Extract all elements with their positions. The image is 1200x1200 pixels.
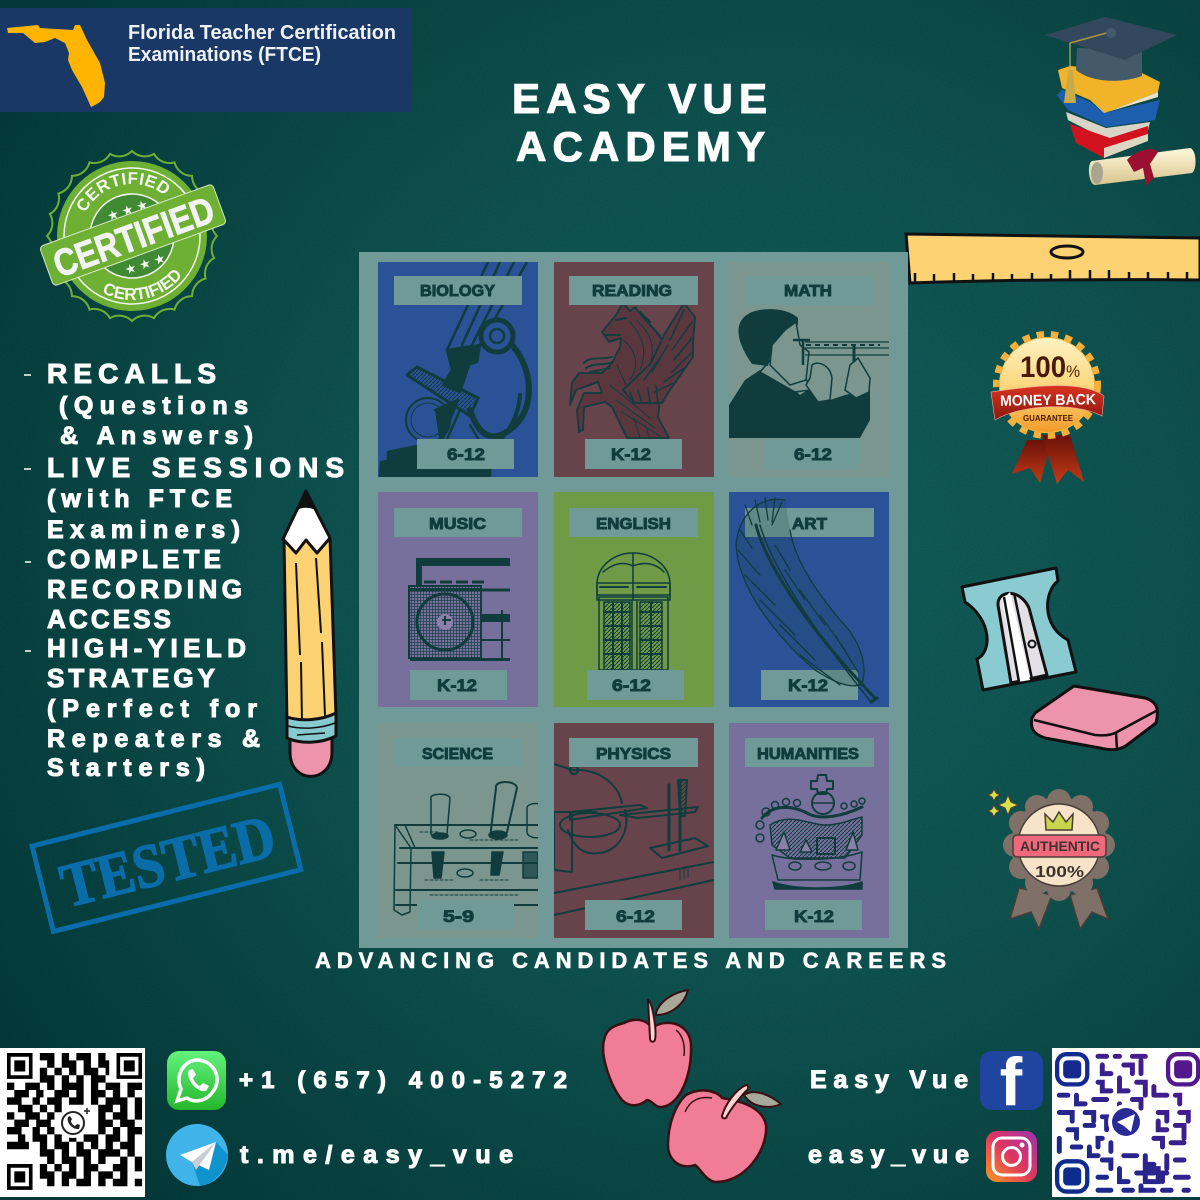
FTCE header banner [0,8,412,112]
illustration: microscope [380,262,529,477]
label: grade [417,900,514,930]
instagram handle: easy_vue [808,1141,969,1169]
badge: certified seal: CERTIFIED [104,270,180,300]
card: science: 5-9 [443,907,474,926]
benefits list: RECALLS [47,358,216,389]
card: science: SCIENCE [422,746,493,763]
card: humanities: HUMANITIES [757,746,859,763]
benefits list: (Perfect for [47,695,257,723]
icon: apples [603,990,781,1182]
banner heading: Florida Teacher Certification [128,21,396,44]
icon: pencil [283,491,336,776]
benefits list: ACCESS [47,604,171,634]
label: subject [569,738,698,767]
card: biology: 6-12 [447,445,485,464]
badge: money back guarantee: GUARANTEE [1023,413,1073,423]
label: grade [765,900,862,930]
label: subject [394,508,522,537]
badge: certified seal [40,150,226,322]
stamp: tested: TESTED [54,802,282,921]
benefits list: STRATEGY [47,663,215,693]
icon: Facebook [980,1044,1043,1120]
phone number: +1 (657) 400-5272 [239,1067,567,1094]
card: english: 6-12 [612,676,651,695]
benefits list [24,358,344,782]
badge: money back guarantee [991,337,1104,484]
banner subheading: Examinations (FTCE) [128,43,321,66]
card: reading [554,262,714,477]
card: music: MUSIC [429,516,486,533]
certified ribbon: CERTIFIED [48,189,220,286]
tagline: ADVANCING CANDIDATES AND CAREERS [315,948,946,973]
badge: money back guarantee: 100% [1020,351,1080,384]
title: ACADEMY [516,123,765,170]
card: reading: K-12 [611,445,651,464]
card: music: K-12 [437,676,477,695]
icon: pencil sharpener [962,568,1076,690]
illustration: man with slide rule [729,309,889,438]
facebook name: Easy Vue [810,1066,968,1094]
badge: certified seal: ★ ★ ★ [105,197,150,224]
benefits list: & Answers) [60,422,253,450]
QR code: Telegram [1052,1048,1200,1197]
card: physics: 6-12 [616,907,655,926]
icon: graduation cap on books with diploma [1045,17,1196,185]
icon: Telegram [166,1124,228,1186]
card: art [729,492,889,707]
title: EASY VUE [512,75,767,122]
card: science [378,723,545,938]
illustration: quill feather [736,498,877,702]
icon: WhatsApp [167,1051,226,1110]
benefits list: RECORDING [47,574,242,604]
badge: authentic 100%: 100% [1035,864,1084,881]
illustration: pegasus [570,303,695,438]
card: biology [378,262,538,477]
label: subject [569,508,698,537]
card: math [729,262,889,477]
benefits list: (Questions [59,392,248,420]
label: grade [417,439,514,469]
badge: authentic 100% [988,789,1115,929]
telegram handle: t.me/easy_vue [240,1141,513,1169]
label: subject [569,276,698,305]
badge: certified seal: CERTIFIED [77,172,170,210]
card: art: K-12 [788,676,828,695]
illustration: test tube rack [394,782,545,915]
benefits list: HIGH-YIELD [47,633,246,663]
benefits list: Examiners) [47,516,240,544]
badge: authentic 100%: AUTHENTIC [1020,839,1100,854]
icon: ruler [906,234,1200,283]
illustration: radio [408,558,510,661]
benefits list: COMPLETE [47,544,221,574]
label: subject [745,738,874,767]
icon: Facebook: f [1000,1044,1023,1120]
label: subject [745,508,874,537]
label: subject [745,276,874,305]
QR code: WhatsApp [0,1048,145,1197]
badge: money back guarantee: MONEY BACK [1000,391,1096,410]
card: english: ENGLISH [596,516,671,533]
card: music [378,492,538,707]
label: grade [587,670,684,700]
icon: Instagram [986,1131,1037,1182]
illustration: crown [756,775,865,889]
icon: Florida state map [7,25,105,107]
card: biology: BIOLOGY [420,283,496,300]
label: subject [394,276,522,305]
card: art: ART [792,516,828,533]
illustration: telephone booth [597,553,670,670]
badge: certified seal: ★ ★ ★ [123,250,167,278]
card: math: 6-12 [794,445,832,464]
title [512,75,767,170]
label: grade [765,439,862,469]
icon: eraser [1031,686,1157,750]
label: grade [585,439,682,469]
benefits list: Repeaters & [47,725,260,753]
label: grade [410,670,507,700]
card: math: MATH [784,283,832,300]
card: reading: READING [592,283,672,300]
panel: FTCE subject grid [359,252,908,948]
benefits list: (with FTCE [47,485,232,513]
benefits list: LIVE SESSIONS [47,452,344,483]
illustration: physics apparatus [554,764,714,915]
card: english [554,492,714,707]
label: grade [585,900,682,930]
card: physics [554,723,714,938]
benefits list: Starters) [47,754,205,782]
card: physics: PHYSICS [596,746,671,763]
card: humanities [729,723,889,938]
card: humanities: K-12 [794,907,834,926]
label: subject [394,738,522,767]
label: grade [761,670,858,700]
